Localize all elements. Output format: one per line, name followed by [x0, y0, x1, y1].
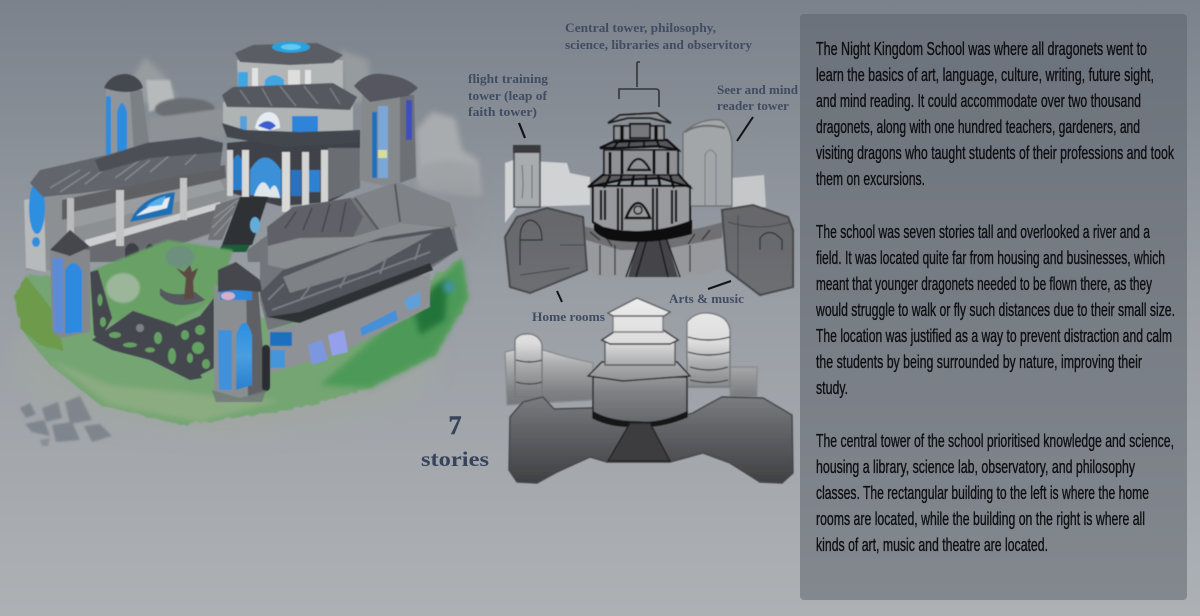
back grey wall [150, 108, 228, 150]
stepping stones [20, 396, 112, 446]
pale back walls [505, 160, 766, 223]
label: 7 stories: stories [421, 447, 489, 471]
shrubs [106, 246, 194, 303]
label: seer tower: Seer and mind [717, 83, 798, 97]
study: tower tier lines [516, 337, 730, 384]
right wing [260, 182, 458, 373]
second tier [223, 102, 353, 142]
paragraph 2 [815, 222, 1175, 398]
right wing base [260, 198, 458, 330]
study: top roof [608, 298, 670, 316]
label: home rooms: Home rooms [532, 310, 605, 324]
label: flight training tower: faith tower) [468, 105, 537, 119]
study: right tower [687, 313, 730, 387]
study: lower roof [588, 362, 690, 381]
sketch: line-art school front view [505, 113, 793, 295]
sketch: arts and music block [722, 205, 793, 295]
arrow: central tower bracket [619, 62, 659, 107]
right wing terrace eave [267, 198, 363, 246]
ground tier [227, 130, 360, 212]
study: left wall [505, 350, 593, 405]
top tier [237, 60, 343, 94]
gate right panel [172, 298, 214, 376]
arrow: flight tower pointer [519, 123, 525, 138]
right wing roof [260, 227, 458, 320]
sketch: flight tower [513, 145, 540, 207]
front gate tower [212, 262, 270, 402]
label: 7 stories: 7 [448, 411, 462, 440]
sketch: value study of school [505, 298, 793, 483]
courtyard lawn [93, 240, 233, 325]
study: middle tier [605, 342, 675, 365]
arrow: arts and music pointer [708, 281, 731, 289]
study: right wall [730, 367, 757, 397]
courtyard tree [160, 265, 205, 305]
sketch: seer tower [683, 120, 732, 206]
study: lower silhouette [509, 397, 793, 483]
grass ground [10, 258, 468, 438]
gate green cells [98, 294, 210, 369]
panel background [800, 14, 1187, 600]
sketch: central pagoda [588, 113, 692, 242]
second roof [222, 83, 357, 110]
left wing [24, 137, 228, 272]
illustration: painted school building [10, 42, 480, 446]
seer tower [354, 74, 418, 186]
label: seer tower: reader tower [717, 99, 789, 113]
label: flight training tower [468, 72, 549, 119]
right wing top terrace [353, 182, 457, 230]
gate arch [92, 311, 202, 380]
label: 7 stories [421, 411, 489, 471]
study: left tower [515, 334, 542, 397]
gate left panel [90, 270, 112, 340]
paragraph 1: them on excursions. [816, 169, 925, 189]
stained-glass patches [308, 292, 420, 365]
back scenery [127, 50, 480, 250]
pagoda lower roof [588, 173, 690, 187]
study: lower pagoda tier [593, 377, 687, 422]
pagoda middle tier [604, 150, 678, 175]
arrow: home rooms pointer [557, 291, 562, 302]
right wing lower wall [268, 273, 430, 373]
arrow: seer tower pointer [737, 117, 753, 141]
left gate tower [50, 230, 90, 338]
back roof disc [155, 98, 215, 120]
pagoda lower tier [593, 186, 692, 242]
label: central tower [565, 21, 753, 52]
label: flight training tower: tower (leap of [468, 89, 548, 103]
ironwork gate [90, 270, 214, 380]
pagoda top tier [614, 124, 664, 140]
sketch: home rooms block [505, 208, 587, 293]
label: seer tower [717, 83, 798, 113]
study: stairs [608, 423, 670, 461]
stairs and entrance [208, 197, 270, 262]
top roof with blue skylight [235, 42, 343, 65]
paragraph 1 [816, 39, 1175, 189]
study: top tier [613, 315, 663, 332]
label: arts and music: Arts & music [669, 292, 744, 306]
label: central tower: Central tower, philosophy, [565, 21, 716, 35]
label: central tower: science, libraries and observitory [565, 38, 753, 52]
central tower [222, 42, 360, 212]
panel: description [800, 14, 1187, 600]
paragraph 3 [816, 431, 1174, 555]
sketch: base and stairs [583, 222, 723, 277]
paragraph 2: study. [816, 378, 848, 398]
pagoda middle roof [600, 140, 678, 150]
third-tier roof [222, 123, 360, 147]
label: flight training tower: flight training [468, 72, 549, 86]
courtyard terrace [268, 223, 455, 270]
paragraph 3: kinds of art, music and theatre are located. [816, 535, 1048, 555]
flight training tower [104, 74, 150, 158]
pagoda top roof [608, 113, 671, 123]
study: middle roof [602, 330, 678, 344]
